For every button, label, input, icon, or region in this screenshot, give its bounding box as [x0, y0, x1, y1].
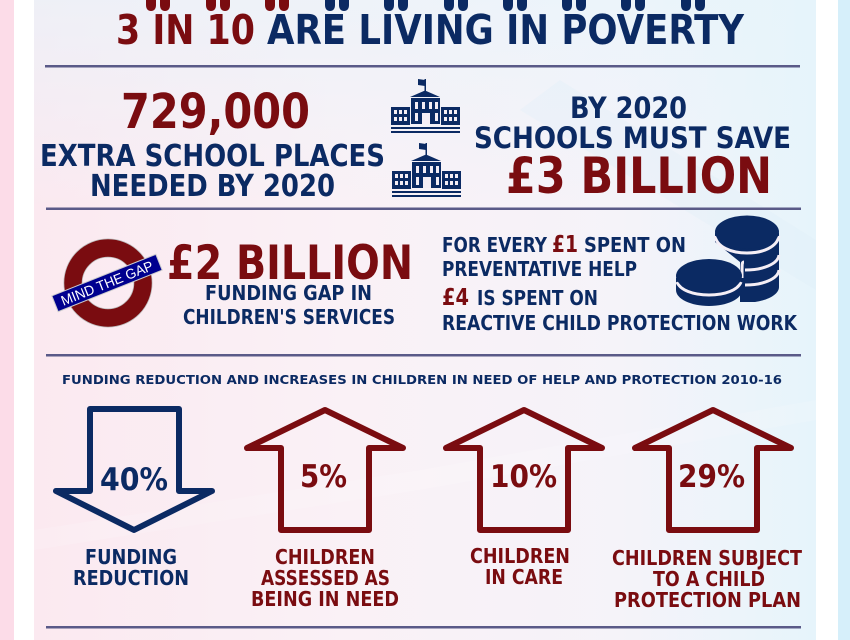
arrow: funding reduction 40%	[56, 409, 212, 530]
chart heading: FUNDING REDUCTION AND INCREASES IN CHILDREN IN NEED OF HELP AND PROTECTION 2010-16	[62, 372, 782, 387]
label: children in care	[470, 544, 570, 589]
stat: schools must save: BY 2020	[570, 91, 687, 125]
stat: funding gap	[167, 236, 413, 329]
title	[116, 6, 745, 54]
label: funding reduction: FUNDING	[85, 545, 177, 569]
text block: preventative versus reactive spend: IS SPENT ON	[477, 286, 598, 310]
stat: extra school places	[40, 84, 385, 204]
label: assessed as being in need: CHILDREN	[275, 545, 375, 569]
text block: preventative versus reactive spend: £4	[442, 285, 469, 311]
label: child protection plan: PROTECTION PLAN	[614, 588, 801, 612]
label: child protection plan: TO A CHILD	[653, 567, 765, 591]
label: child protection plan: CHILDREN SUBJECT	[612, 546, 802, 570]
title: 3 IN 10	[116, 6, 255, 54]
icon row: children footprints	[146, 0, 705, 11]
arrow: assessed in need 5%: 5%	[300, 459, 347, 495]
arrow: funding reduction 40%: 40%	[100, 462, 168, 498]
arrow: children in care 10%	[446, 410, 602, 530]
arrow: children in care 10%: 10%	[490, 459, 557, 495]
label: children in care: IN CARE	[485, 565, 563, 589]
arrow: assessed in need 5%	[247, 410, 403, 530]
stat: funding gap: FUNDING GAP IN	[205, 281, 372, 305]
arrow: child protection plan 29%: 29%	[678, 459, 745, 495]
label: assessed as being in need	[251, 545, 399, 611]
label: children in care: CHILDREN	[470, 544, 570, 568]
icon: mind the gap roundel: MIND THE GAP	[59, 257, 155, 309]
label: child protection plan	[612, 546, 802, 612]
text block: preventative versus reactive spend: REACTIVE CHILD PROTECTION WORK	[442, 311, 798, 335]
arrow: child protection plan 29%	[635, 410, 791, 530]
text block: preventative versus reactive spend	[442, 232, 798, 335]
stat: schools must save: SCHOOLS MUST SAVE	[474, 121, 791, 155]
icon: coin stacks	[676, 216, 779, 306]
icon: mind the gap roundel	[52, 248, 162, 318]
stat: funding gap: £2 BILLION	[167, 236, 413, 291]
stat: funding gap: CHILDREN'S SERVICES	[183, 305, 395, 329]
stat: extra school places: NEEDED BY 2020	[90, 169, 335, 204]
stat: schools must save	[474, 91, 791, 205]
text block: preventative versus reactive spend: PREVENTATIVE HELP	[442, 257, 637, 281]
text block: preventative versus reactive spend: SPENT ON	[584, 233, 686, 257]
icon: school bottom	[392, 143, 461, 197]
label: funding reduction: REDUCTION	[73, 566, 189, 590]
title: ARE LIVING IN POVERTY	[267, 6, 745, 54]
label: assessed as being in need: BEING IN NEED	[251, 587, 399, 611]
icon: school top	[391, 79, 460, 133]
label: funding reduction	[73, 545, 189, 590]
stat: schools must save: £3 BILLION	[506, 147, 772, 205]
stat: extra school places: 729,000	[121, 84, 310, 140]
stat: extra school places: EXTRA SCHOOL PLACES	[40, 139, 385, 174]
text block: preventative versus reactive spend: FOR EVERY	[442, 233, 547, 257]
label: assessed as being in need: ASSESSED AS	[261, 566, 390, 590]
text block: preventative versus reactive spend: £1	[552, 232, 578, 258]
